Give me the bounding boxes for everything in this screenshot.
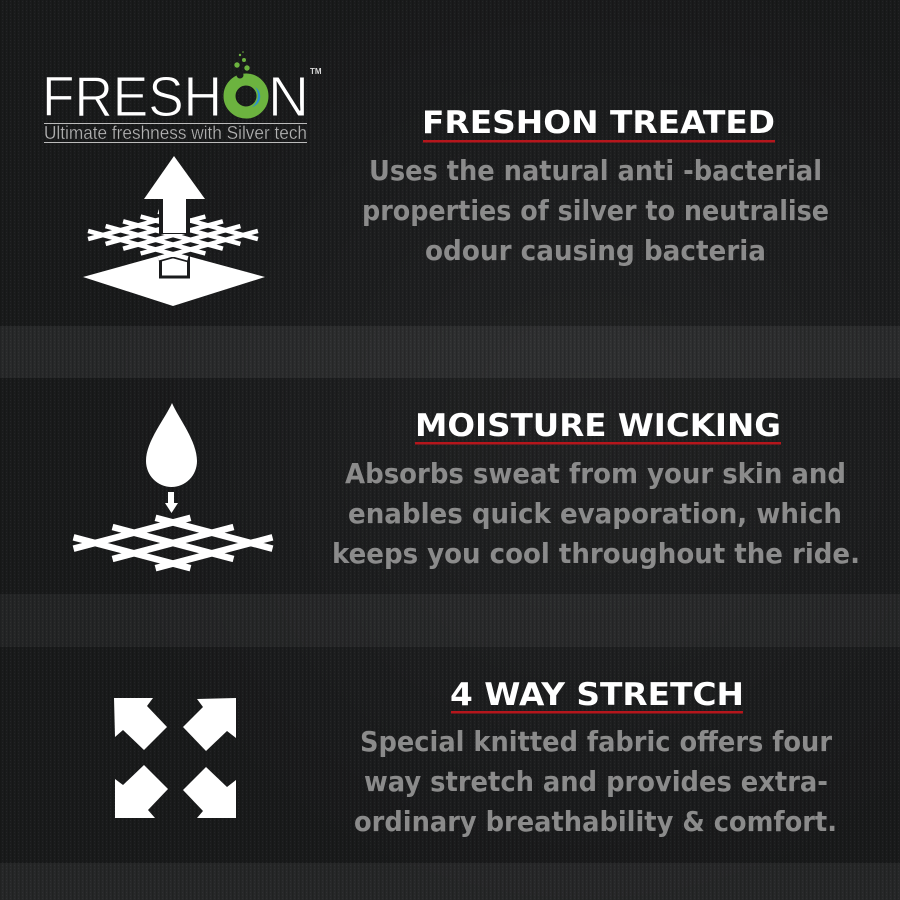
arrow down-right — [183, 767, 236, 818]
trademark: TM — [310, 67, 322, 76]
water drop — [146, 403, 197, 487]
up arrow — [144, 156, 205, 234]
icon: water drop on mesh — [74, 403, 272, 568]
text: 4 Way Stretch description: Special knitted fabric offers four — [360, 725, 832, 758]
heading: Moisture Wicking: MOISTURE WICKING — [415, 408, 781, 444]
logo wordmark: FRESH — [42, 65, 222, 129]
logo ring O — [230, 51, 262, 112]
logo tagline: Ultimate freshness with Silver tech — [44, 123, 307, 143]
mesh — [88, 212, 258, 258]
text: Freshon Treated description: properties of silver to neutralise — [362, 194, 829, 227]
logo letter N: N — [268, 65, 309, 129]
arrow up-left — [114, 698, 167, 750]
dark shaft outline — [160, 250, 188, 277]
heading: Freshon Treated: FRESHON TREATED — [422, 105, 775, 141]
text: 4 Way Stretch description — [354, 725, 837, 838]
text: Moisture Wicking description: Absorbs sweat from your skin and — [345, 457, 846, 490]
base fabric diamond — [83, 252, 265, 306]
text: 4 Way Stretch description: ordinary breathability & comfort. — [354, 805, 837, 838]
arrow down-left — [115, 765, 168, 818]
icon: four way arrows — [114, 698, 236, 818]
arrow up-right — [183, 698, 236, 751]
text: Moisture Wicking description: enables quick evaporation, which — [348, 497, 842, 530]
text: Freshon Treated description: Uses the natural anti -bacterial — [369, 154, 822, 187]
small down arrow — [165, 492, 178, 513]
text: Moisture Wicking description: keeps you cool throughout the ride. — [332, 537, 860, 570]
heading: 4 Way Stretch: 4 WAY STRETCH — [450, 677, 744, 713]
text: Freshon Treated description: odour causing bacteria — [425, 234, 766, 267]
text: Moisture Wicking description — [332, 457, 860, 570]
text: 4 Way Stretch description: way stretch and provides extra- — [364, 765, 828, 798]
icon: odour neutralising mesh and arrow — [83, 156, 265, 306]
text: Freshon Treated description — [362, 154, 829, 267]
logo: Freshon — [42, 51, 322, 143]
mesh — [74, 518, 272, 568]
